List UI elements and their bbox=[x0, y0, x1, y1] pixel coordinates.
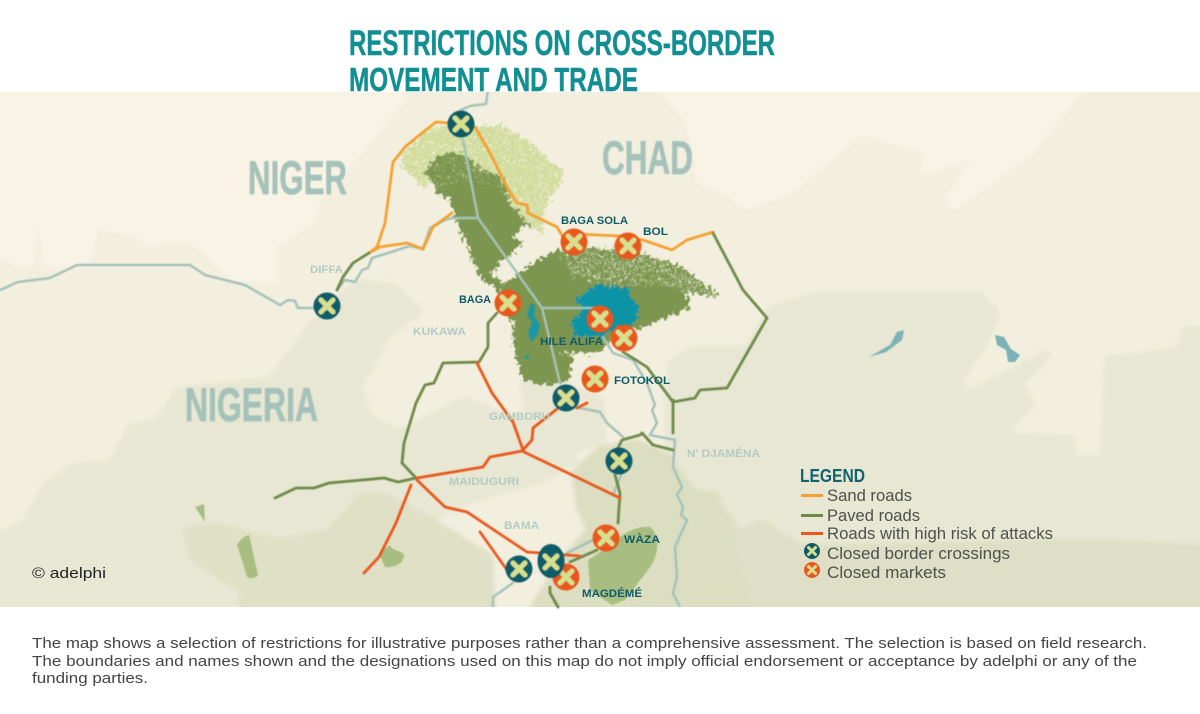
town labels: WÀZA bbox=[624, 533, 660, 546]
town labels: BOL bbox=[643, 226, 668, 238]
place labels bbox=[310, 264, 760, 532]
marker: double crossing bbox=[538, 544, 564, 578]
closed markets bbox=[494, 228, 642, 590]
marker: Fotokol market bbox=[582, 366, 608, 392]
legend: risky roads: Roads with high risk of attacks bbox=[827, 524, 1053, 543]
lake: northern speckled pool bbox=[400, 123, 564, 236]
marker: eastern crossing bbox=[606, 448, 632, 474]
marker: Diffa crossing bbox=[314, 292, 340, 320]
marker: Gamboru crossing bbox=[552, 384, 580, 412]
marker: Baga market bbox=[494, 290, 522, 316]
town labels: HILE ALIFA bbox=[540, 336, 603, 348]
town labels: BAGA bbox=[459, 294, 491, 306]
lake: eastern inland lake bbox=[869, 330, 904, 357]
disclaimer note bbox=[32, 635, 1147, 687]
lake: speckled upper green bbox=[424, 153, 530, 230]
town labels: BAGA SOLA bbox=[561, 215, 628, 227]
legend: closed border crossings: Closed border crossings bbox=[827, 544, 1010, 563]
Lake Chad basin bbox=[400, 123, 719, 385]
town labels: FOTOKOL bbox=[614, 375, 670, 387]
marker: Waza market bbox=[592, 524, 620, 552]
disclaimer note: funding parties. bbox=[32, 670, 148, 687]
sand roads bbox=[369, 122, 713, 253]
marker: lake market south bbox=[610, 324, 638, 352]
roads with high risk of attacks bbox=[364, 363, 620, 573]
disclaimer note: The boundaries and names shown and the designations used on this map do not imply official endorsement or acceptance by adelphi or any of the bbox=[32, 653, 1137, 670]
marker: northern crossing bbox=[448, 110, 474, 138]
country labels: NIGER bbox=[248, 151, 347, 204]
copyright: © adelphi bbox=[32, 565, 106, 582]
title bbox=[349, 24, 775, 98]
place labels: MAIDUGURI bbox=[449, 476, 519, 488]
marker: Bol market bbox=[614, 232, 642, 260]
place labels: BAMA bbox=[504, 520, 539, 532]
rivers and borders bbox=[0, 90, 687, 607]
title: MOVEMENT AND TRADE bbox=[349, 61, 638, 98]
lake: green vegetation bbox=[433, 183, 689, 385]
marker: Hile Alifa market bbox=[586, 306, 614, 332]
title: RESTRICTIONS ON CROSS-BORDER bbox=[349, 24, 775, 63]
legend: sand roads: Sand roads bbox=[827, 486, 912, 505]
place labels: KUKAWA bbox=[413, 326, 466, 338]
disclaimer note: The map shows a selection of restrictions for illustrative purposes rather than a comprehensive assessment. The selection is based on field research. bbox=[32, 635, 1147, 652]
place labels: N' DJAMÉNA bbox=[687, 447, 760, 460]
marker: Baga Sola market bbox=[560, 228, 588, 256]
marker: Bama crossing bbox=[506, 556, 532, 582]
background terrain tones bbox=[0, 70, 1200, 630]
paved roads bbox=[275, 233, 767, 607]
country labels bbox=[185, 131, 693, 431]
place labels: GAMBORU bbox=[489, 411, 550, 423]
town labels: MAGDÉMÉ bbox=[582, 587, 642, 600]
legend: paved roads: Paved roads bbox=[827, 506, 920, 525]
legend heading: LEGEND bbox=[800, 466, 865, 486]
closed border crossings bbox=[314, 110, 632, 582]
marker: Magdeme market bbox=[552, 564, 580, 590]
place labels: DIFFA bbox=[310, 264, 343, 276]
lake: open water bbox=[571, 285, 640, 337]
map background bbox=[0, 70, 1200, 630]
legend: closed markets: Closed markets bbox=[827, 563, 946, 582]
vegetation patches and inland lakes bbox=[195, 330, 1020, 605]
country labels: CHAD bbox=[602, 131, 693, 184]
roads bbox=[275, 122, 767, 607]
town labels bbox=[459, 215, 670, 600]
lake: speckled southern fringe bbox=[557, 248, 719, 296]
country labels: NIGERIA bbox=[185, 378, 318, 431]
lake: far eastern inland lake bbox=[995, 335, 1020, 362]
lake: small channels bbox=[525, 303, 540, 359]
legend bbox=[800, 466, 1053, 582]
